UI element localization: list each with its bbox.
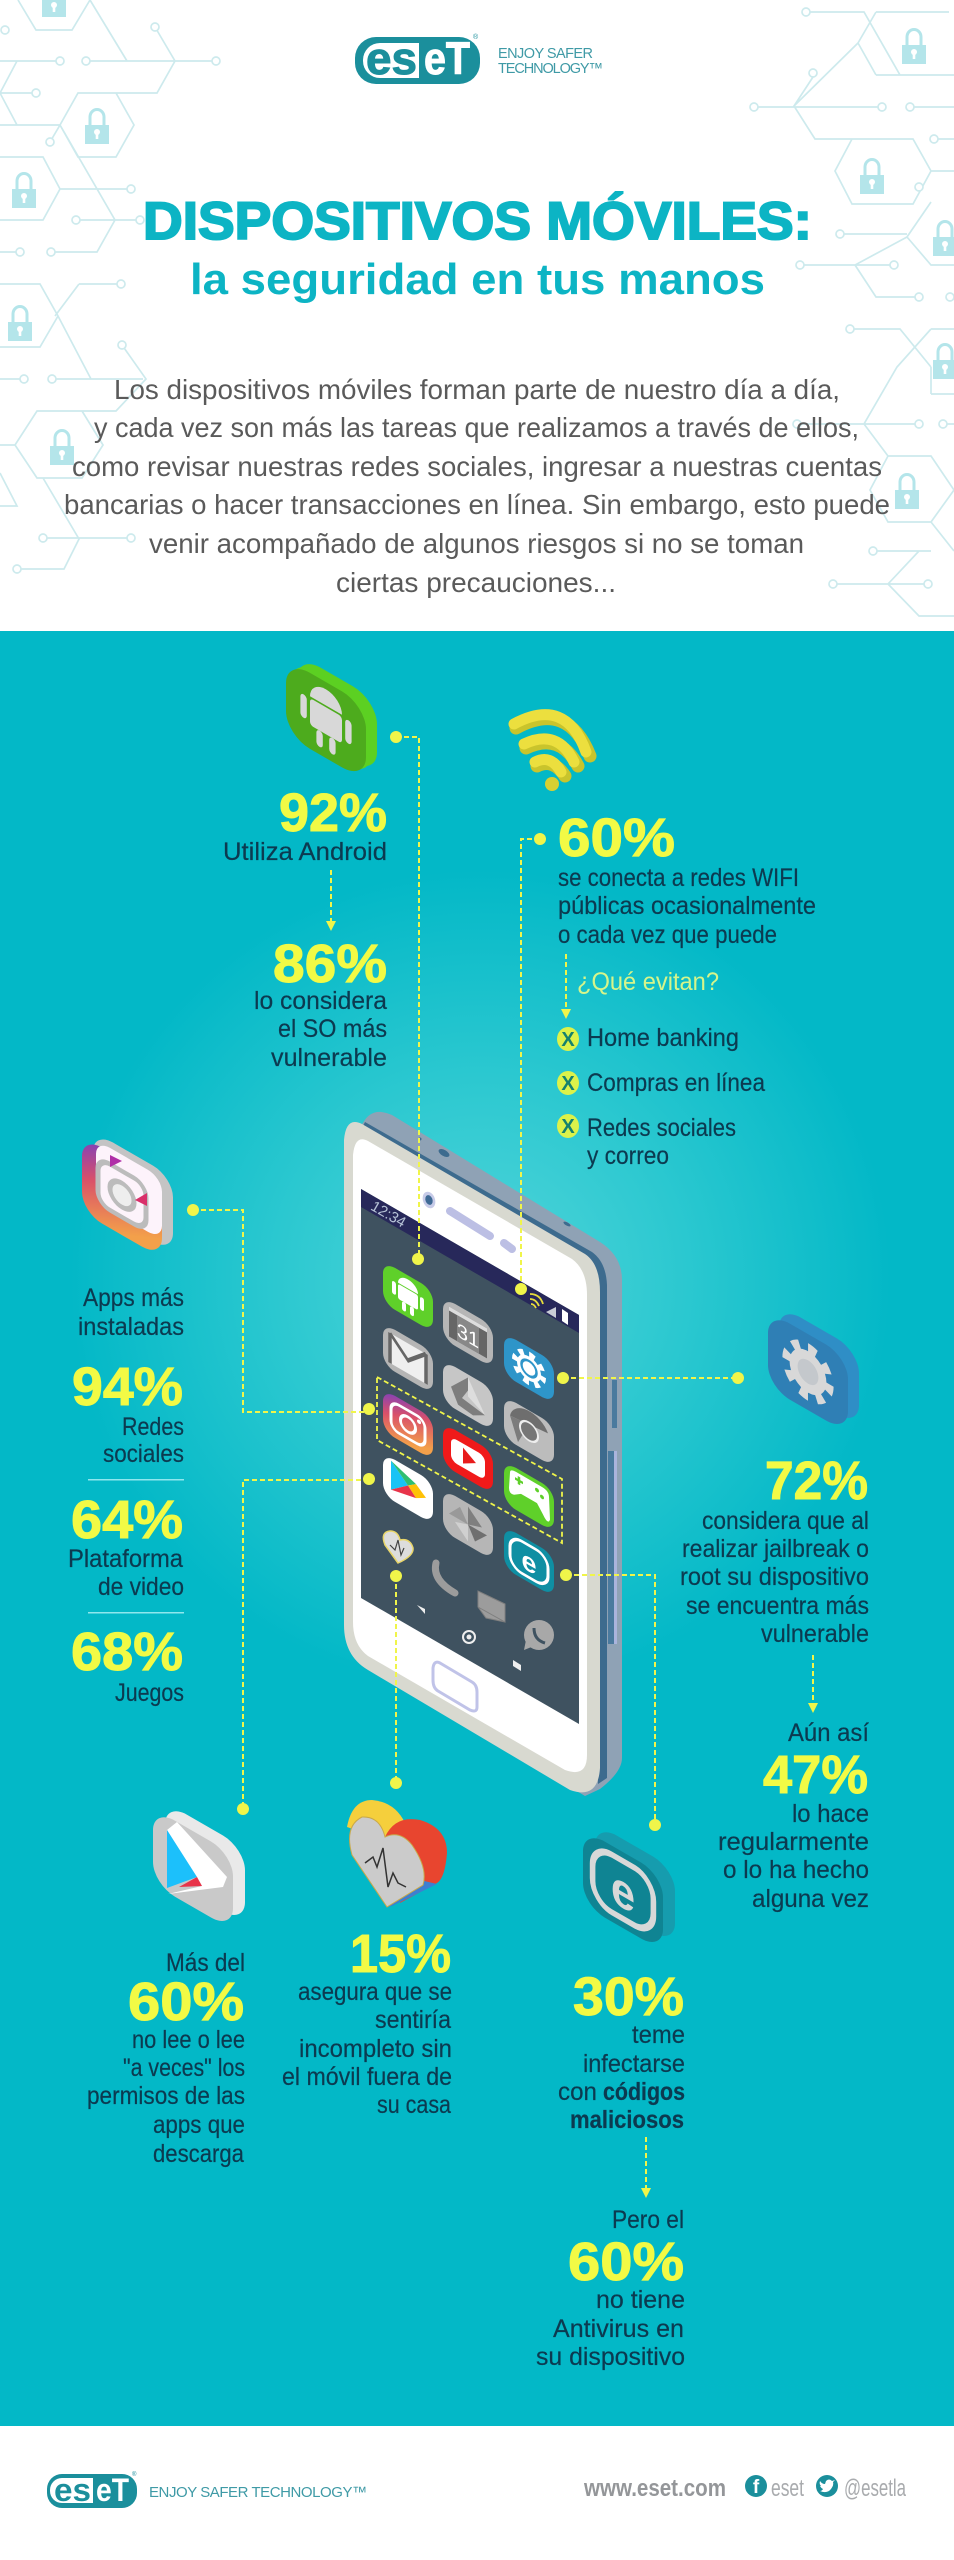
description	[718, 1800, 869, 1913]
description: permisos de las	[87, 2082, 245, 2110]
stat 60%: 60%	[568, 2232, 684, 2292]
stat 94%	[72, 1357, 184, 1468]
dock icon: WhatsApp	[524, 1620, 554, 1650]
sensors on edge	[418, 1138, 571, 1227]
description: asegura que se	[298, 1978, 452, 2006]
icon: Facebook: f	[753, 2477, 760, 2498]
stat 64%: de video	[98, 1573, 184, 1601]
icon: 3D Play	[153, 1802, 245, 1930]
description: incompleto sin	[299, 2035, 452, 2063]
description	[558, 864, 816, 949]
side buttons	[608, 1380, 617, 1644]
app icon: Android	[383, 1261, 433, 1332]
description: con	[558, 2078, 597, 2106]
intro paragraph: bancarias o hacer transacciones en línea. Sin embargo, esto puede	[64, 489, 890, 520]
phone back and edge	[345, 1112, 622, 1796]
app icon: mail	[383, 1323, 433, 1394]
description: teme	[632, 2021, 685, 2049]
description: o cada vez que puede	[558, 921, 777, 949]
panel: jailbreak stats	[680, 1305, 869, 1913]
circuit pattern with padlocks, right side	[750, 8, 954, 616]
footer logo: ENJOY SAFER TECHNOLOGY™	[149, 2484, 367, 2501]
description: Antivirus en	[553, 2315, 684, 2343]
app icon: pinwheel	[443, 1489, 493, 1560]
description	[282, 1978, 452, 2119]
description: no lee o lee	[132, 2026, 245, 2054]
phone illustration	[344, 1112, 622, 1796]
description: considera que al	[702, 1507, 869, 1535]
icon: 3D ESET	[583, 1823, 675, 1951]
list: avoided activities: X	[561, 1116, 575, 1138]
description: lo hace	[792, 1800, 869, 1828]
label: instaladas	[78, 1313, 184, 1341]
description: o lo ha hecho	[723, 1856, 869, 1884]
arrow	[641, 2137, 651, 2198]
description: regularmente	[718, 1828, 869, 1856]
stat 86%: 86%	[273, 934, 387, 994]
phone white face	[353, 1139, 587, 1772]
question: ¿Qué evitan?	[577, 968, 719, 996]
description: códigos	[603, 2078, 685, 2106]
lead-in: Más del	[166, 1949, 245, 1977]
stat 64%: Plataforma	[68, 1545, 183, 1573]
app icon: calendar	[443, 1297, 493, 1368]
description: lo considera	[254, 987, 387, 1015]
intro paragraph: venir acompañado de algunos riesgos si no se toman	[149, 528, 804, 559]
dock icon: phone	[435, 1563, 455, 1593]
ESET logo header: es	[366, 33, 417, 84]
description	[87, 2026, 245, 2168]
app icon: calendar: 31	[457, 1318, 479, 1354]
intro paragraph	[64, 374, 890, 598]
intro paragraph: y cada vez son más las tareas que realizamos a través de ellos,	[94, 412, 859, 443]
icon: 3D Instagram	[82, 1131, 173, 1258]
description: realizar jailbreak o	[682, 1535, 869, 1563]
description: sentiría	[375, 2006, 451, 2034]
app icon: drive	[443, 1360, 493, 1431]
camera and speaker	[420, 1190, 512, 1249]
description: públicas ocasionalmente	[558, 892, 816, 920]
app icon: game controller	[504, 1461, 554, 1532]
label: Apps más	[83, 1284, 184, 1312]
stat 30%: 30%	[573, 1967, 684, 2027]
panel: attachment stat	[282, 1800, 452, 2119]
app icon: settings	[504, 1333, 554, 1404]
connector lines with dots	[187, 731, 744, 1831]
arrow	[561, 954, 571, 1019]
description: apps que	[153, 2111, 245, 2139]
stat 47%: 47%	[763, 1745, 868, 1805]
description: root su dispositivo	[680, 1563, 869, 1591]
stat 94%: Redes	[122, 1413, 184, 1441]
ESET logo header	[355, 33, 603, 84]
stat 94%: 94%	[72, 1357, 183, 1417]
list: avoided activities: Redes sociales	[587, 1114, 736, 1142]
panel: Android stats	[223, 654, 387, 1072]
stat 68%: 68%	[71, 1622, 183, 1682]
ESET logo header: ENJOY SAFER	[498, 46, 593, 62]
description: infectarse	[583, 2050, 685, 2078]
intro paragraph: Los dispositivos móviles forman parte de nuestro día a día,	[114, 374, 840, 405]
footer logo: es	[54, 2472, 91, 2508]
Twitter handle: @esetla	[844, 2475, 906, 2502]
stat 64%	[68, 1490, 184, 1601]
clock: 12:34	[368, 1198, 409, 1231]
arrow	[326, 870, 336, 931]
app icon: chrome	[504, 1396, 554, 1467]
stat 64%: 64%	[71, 1490, 183, 1550]
home button	[433, 1662, 477, 1711]
description	[558, 2021, 685, 2134]
description: descarga	[153, 2140, 244, 2168]
stat 72%: 72%	[765, 1451, 868, 1511]
panel: app permissions	[87, 1802, 245, 2168]
ESET logo header: ®	[473, 33, 479, 41]
screen	[361, 1189, 579, 1724]
stat 68%	[71, 1622, 184, 1707]
list: avoided activities: y correo	[587, 1142, 669, 1170]
stat 94%: sociales	[103, 1440, 184, 1468]
description: el SO más	[278, 1015, 387, 1043]
teal main panel	[0, 631, 954, 2426]
lead-in: Aún así	[788, 1719, 869, 1747]
footer logo: eT	[96, 2472, 129, 2508]
Facebook handle: eset	[771, 2475, 804, 2502]
description: se encuentra más	[686, 1592, 869, 1620]
status bar	[361, 1189, 579, 1333]
subtitle: la seguridad en tus manos	[190, 255, 765, 304]
description	[254, 987, 387, 1072]
description: se conecta a redes WIFI	[558, 864, 799, 892]
description: vulnerable	[761, 1620, 869, 1648]
footer logo: ®	[132, 2471, 137, 2478]
navigation icons	[417, 1605, 521, 1671]
description: maliciosos	[570, 2106, 684, 2134]
phone bezel	[344, 1122, 600, 1792]
description: su dispositivo	[536, 2343, 685, 2371]
stat 60%: 60%	[558, 808, 675, 868]
dock icon: messages	[478, 1591, 505, 1622]
description: alguna vez	[752, 1885, 869, 1913]
ESET logo header: TECHNOLOGY™	[498, 61, 603, 77]
description: su casa	[377, 2091, 451, 2119]
lead-in: Pero el	[612, 2206, 684, 2234]
arrow	[808, 1655, 818, 1713]
panel: WiFi stats	[514, 715, 816, 1170]
list: avoided activities: Home banking	[587, 1024, 739, 1052]
intro paragraph: ciertas precauciones...	[336, 567, 616, 598]
title: DISPOSITIVOS MÓVILES:	[143, 191, 812, 251]
label	[78, 1284, 184, 1341]
list: avoided activities: X	[561, 1029, 575, 1051]
icon: 3D Android	[286, 654, 377, 781]
circuit pattern with padlocks, left side	[0, 0, 220, 573]
description: "a veces" los	[123, 2054, 245, 2082]
app icon: Instagram	[383, 1389, 433, 1460]
intro paragraph: como revisar nuestras redes sociales, ingresar a nuestras cuentas	[72, 451, 882, 482]
list: avoided activities: X	[561, 1073, 575, 1095]
status icons	[530, 1294, 568, 1325]
icon: Facebook	[745, 2475, 767, 2498]
dock icon: heart	[383, 1531, 413, 1563]
list: avoided activities: Compras en línea	[587, 1069, 765, 1097]
panel: most installed apps	[68, 1131, 184, 1707]
icon: 3D heart	[347, 1800, 447, 1907]
app icon: ESET: e	[521, 1544, 537, 1582]
stat 92%: 92%	[279, 783, 387, 843]
icon: Twitter	[816, 2475, 838, 2497]
description	[536, 2286, 685, 2371]
footer logo	[47, 2471, 367, 2508]
stat 60%: 60%	[128, 1972, 244, 2032]
panel: malware stats	[536, 1823, 685, 2371]
dashed box around popular apps	[377, 1377, 562, 1543]
icon: 3D settings gear	[768, 1305, 859, 1433]
label: Utiliza Android	[223, 838, 387, 866]
list: avoided activities	[557, 1024, 765, 1170]
ESET logo header: eT	[424, 33, 470, 84]
app icon: ESET	[504, 1526, 554, 1597]
website: www.eset.com	[583, 2475, 726, 2502]
app icon: Play	[383, 1453, 433, 1524]
stat 68%: Juegos	[115, 1679, 184, 1707]
app icon: YouTube	[443, 1423, 493, 1494]
description: no tiene	[596, 2286, 685, 2314]
description: vulnerable	[271, 1044, 387, 1072]
description	[680, 1507, 869, 1648]
stat 15%: 15%	[350, 1924, 451, 1984]
description: el móvil fuera de	[282, 2063, 452, 2091]
icon: 3D ESET: e	[611, 1858, 635, 1926]
icon: 3D WiFi	[514, 715, 590, 791]
